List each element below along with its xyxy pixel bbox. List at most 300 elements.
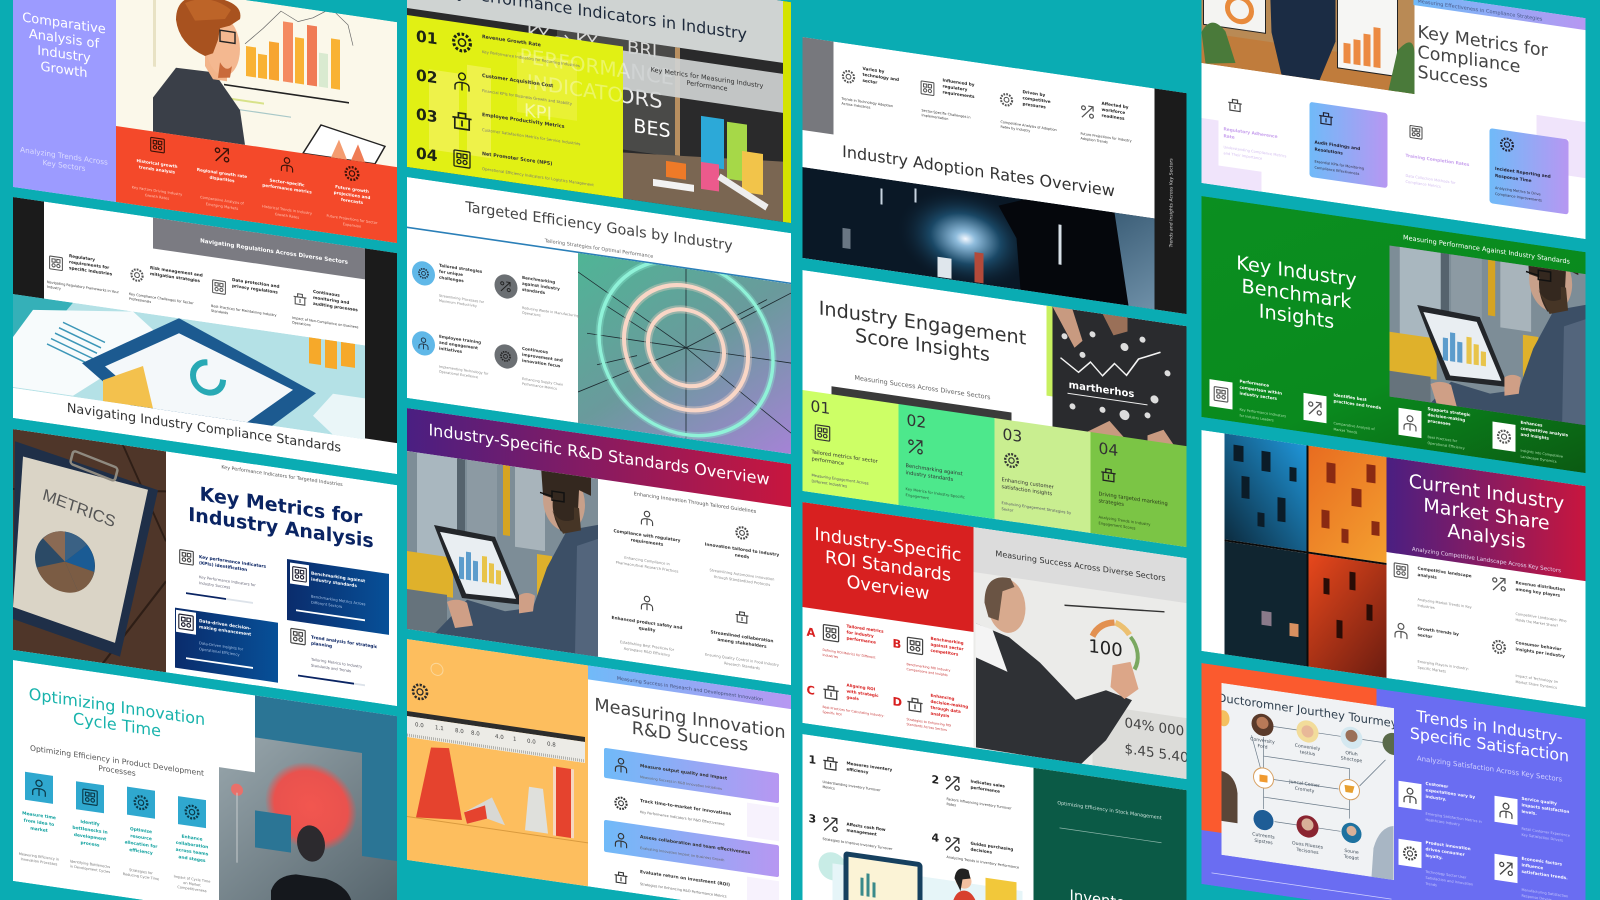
metric: Incident Reporting	[1490, 128, 1568, 215]
market share items: Emerging Players in Industry-	[1418, 660, 1470, 671]
panel: Key Metrics for Industry Analysis	[13, 429, 397, 706]
side label: Key Metrics for Measuring Industry	[651, 66, 764, 90]
photo: person facing red brain	[219, 690, 397, 900]
image: customer journey diagram: Cutreents	[1252, 831, 1275, 841]
adoption items row: requirements	[942, 89, 975, 99]
market share items: Impact of Technology on	[1516, 674, 1558, 684]
metric: Regulatory Adherence Rate: and Their Importance	[1224, 151, 1263, 161]
metric: Incident Reporting: Analyzing Metrics to Drive	[1495, 186, 1541, 197]
R&D standards items: Enhanced product safety and	[612, 615, 682, 631]
inventory items: 4	[931, 831, 939, 845]
compliance items row: Industry	[47, 285, 61, 291]
compliance items row: Impact of Non-Compliance on Business	[292, 316, 359, 329]
ROI items: competitors	[930, 648, 959, 657]
KPI list on lime panel	[407, 15, 631, 200]
subtitle: Analyzing Satisfaction Across Key Sectors	[1417, 753, 1562, 784]
R&D standards items: Aerospace R&D Efficiency	[624, 647, 671, 658]
KPI list on lime panel: INDICATO	[527, 70, 623, 108]
photo: metrics clipboard: METRICS	[41, 485, 117, 531]
ROI items: Benchmarking	[930, 636, 964, 646]
metric card: KPIs: Key Performance Indicators for	[199, 575, 256, 588]
photo: man marking gauge on whiteboard: 100	[1088, 636, 1123, 662]
ROI items: Industries	[822, 653, 839, 659]
metric card: data-driven: Data-driven decision-	[199, 618, 251, 632]
title: Key Industry	[1236, 251, 1357, 292]
engagement step 02: 02	[906, 411, 926, 432]
panel: Key Performance Indicators in Industry	[407, 0, 791, 223]
KPI list on lime panel: Customer Acquisition Cost	[482, 73, 554, 89]
market share items: Analyzing Market Trends in Key	[1418, 598, 1472, 609]
metric: Audit Findings: Audit Findings and	[1314, 140, 1360, 152]
image: customer journey diagram	[1222, 683, 1394, 880]
benchmark items	[1210, 374, 1569, 466]
KPI list on lime panel: Financial KPIs for Business Growth and Stability	[482, 88, 573, 106]
benchmark items: Best Practices for	[1428, 435, 1458, 443]
image: customer journey diagram: Ouos Rlueses	[1292, 840, 1324, 851]
goals list: Enhancing Supply Chain	[522, 377, 563, 387]
red band with four growth items: Expansion	[343, 222, 361, 229]
satisfaction items: satisfaction trends.	[1522, 869, 1568, 881]
KPI list on lime panel: 02	[416, 66, 438, 87]
ROI items: decision-making	[930, 699, 968, 709]
metric: Training Completion Rates: Training Completion Rates	[1406, 153, 1470, 168]
KPI list on lime panel: Operational Efficiency Indicators for Logistics Management	[482, 166, 594, 187]
inventory items: Metrics	[822, 785, 835, 791]
R&D standards items: Research Standards	[724, 661, 760, 671]
satisfaction items: levels.	[1522, 809, 1537, 816]
metric: Regulatory Adherence Rate: Regulatory Adherence	[1224, 126, 1278, 140]
ROI items: Specific ROI	[822, 710, 842, 717]
decorative pale blocks	[1202, 66, 1586, 239]
compliance items row: Best Practices for Maintaining Industry	[211, 304, 277, 317]
KPI list on lime panel: 01	[416, 27, 438, 48]
title: Key Metrics for	[1418, 23, 1549, 62]
panel: Measuring Innovation R&D Success	[407, 639, 791, 900]
engagement step 03	[994, 418, 1090, 533]
image: customer journey diagram: Juncal Comer	[1288, 779, 1320, 789]
innovation steps: process	[80, 840, 100, 849]
compliance items row: monitoring and	[313, 295, 349, 305]
inventory items: efficiency	[846, 766, 869, 775]
KPI list on lime panel: Customer Satisfaction Metrics for Service Industries	[482, 127, 580, 146]
metric card: trend analysis: planning	[311, 641, 332, 650]
top band	[1414, 0, 1586, 30]
adoption items row: Adoption Trends	[1080, 136, 1108, 144]
red band with four growth items: Comparative Analysis of	[200, 195, 245, 206]
innovation steps: across teams	[176, 847, 209, 858]
subtitle: Measuring Performance Against Industry Standards	[1403, 233, 1571, 266]
satisfaction items: impacts satisfaction	[1522, 802, 1569, 814]
title: Navigating Industry Compliance Standards	[67, 401, 341, 456]
innovation steps: and stages	[178, 854, 206, 864]
title: Insights	[1259, 299, 1334, 333]
title: Optimizing Innovation	[29, 684, 205, 729]
engagement step 03: 03	[1002, 425, 1022, 446]
inventory items: Rates	[946, 802, 956, 807]
engagement step 03: Enhancing customer	[1001, 477, 1055, 491]
illustration: ruler and measuring shapes: 0.0	[527, 739, 536, 746]
image: customer journey diagram: Ford	[1258, 743, 1268, 751]
subtitle: Measuring Success Across Diverse Sectors	[854, 374, 991, 402]
goals list	[412, 259, 579, 394]
photo: chalkboard with hands	[1052, 306, 1186, 446]
red title block: Overview	[847, 573, 929, 605]
red band with four growth items: projections and	[334, 190, 370, 200]
red band with four growth items: trends analysis	[139, 164, 176, 175]
engagement step 01: performance	[811, 456, 844, 467]
side bar with vertical label	[1154, 88, 1186, 314]
subtitle: Enhancing Innovation Through Tailored Guidelines	[634, 491, 757, 515]
goals list: Streamlining Processes for	[439, 294, 485, 304]
compliance items row: mitigation strategies	[150, 271, 200, 283]
engagement step 01: 01	[810, 397, 830, 418]
market share items: Industries	[1418, 604, 1435, 610]
innovation steps: bottlenecks in	[72, 825, 108, 836]
innovation steps: Enhance	[182, 834, 202, 843]
benchmark items: Supports strategic	[1428, 406, 1471, 417]
goals list: Tailored strategies	[439, 263, 483, 274]
metric: Regulatory Adherence Rate: Understanding Compliance Metrics	[1224, 145, 1287, 158]
adoption items row: Across Industries	[842, 102, 871, 110]
title: Score Insights	[855, 324, 990, 366]
compliance items row: Operations	[292, 321, 311, 327]
satisfaction items: expectations vary by	[1426, 787, 1475, 799]
compliance items row: Data protection and	[232, 277, 280, 289]
ROI items: Defining ROI Metrics for Different	[822, 648, 876, 660]
market share items	[1394, 562, 1567, 691]
subtitle: Measuring Success Across Diverse Sectors	[995, 549, 1166, 583]
title: Trends in Industry-	[1415, 706, 1563, 747]
inventory items: 1	[808, 753, 816, 767]
photo: chalkboard and colored blocks	[514, 21, 791, 223]
metric: Audit Findings	[1310, 102, 1388, 188]
metric: Training Completion Rates: Data Collection Methods for	[1406, 174, 1456, 185]
engagement step 03: satisfaction insights	[1001, 484, 1052, 497]
metric card: benchmarking: Benchmarking against	[311, 571, 365, 584]
metric card: KPIs: Key performance indicators	[199, 554, 266, 570]
inventory items: Affects cash flow	[847, 821, 886, 832]
metric card: KPIs: (KPIs) identification	[199, 560, 247, 573]
ROI items: goals	[847, 694, 859, 701]
title: Cycle Time	[73, 709, 161, 741]
metric: Regulatory Adherence Rate: Rate	[1224, 133, 1235, 141]
ROI items: A	[806, 625, 815, 640]
metric card: benchmarking: Benchmarking Metrics Across	[311, 595, 365, 606]
satisfaction items: Retail Customer Experience	[1522, 827, 1570, 838]
red band with four growth items: forecasts	[341, 197, 363, 205]
photo: chalkboard and colored blocks: PERFORMANCE	[514, 42, 674, 90]
image: customer journey diagram: Conversity	[1250, 736, 1275, 746]
engagement step 01: Measuring Engagement Across	[812, 473, 869, 486]
engagement step 02	[898, 404, 994, 519]
metric card: data-driven	[175, 608, 278, 683]
engagement step 03: Enhancing Engagement Strategies by	[1001, 501, 1072, 515]
panel: Key Metrics for Compliance Success	[1202, 0, 1586, 239]
benchmark items: Key Performance Indicators	[1240, 408, 1286, 418]
illustration: ruler and measuring shapes: 1.1	[435, 725, 444, 732]
metric: Audit Findings: Resolutions	[1314, 147, 1343, 157]
metric: Training Completion Rates	[1406, 125, 1470, 193]
photo: man marking gauge on whiteboard	[974, 527, 1186, 779]
R&D standards items: Streamlining Automotive Innovation	[710, 568, 774, 582]
adoption items row: Future Projections for Industry	[1080, 132, 1132, 143]
top band: Measuring Success in Research and Development Innovation	[617, 676, 763, 703]
image: customer journey diagram: Conveniely	[1295, 743, 1320, 752]
metric: Incident Reporting: Response Time	[1495, 173, 1532, 184]
benchmark items: and insights	[1520, 432, 1549, 441]
R&D standards items: quality	[639, 625, 656, 634]
innovation steps	[19, 771, 210, 894]
KPI list on lime panel: 04	[416, 144, 438, 165]
R&D standards items: among stakeholders	[717, 637, 767, 650]
header band: Navigating Regulations Across Diverse Sectors	[200, 238, 349, 266]
photo: chalkboard and colored blocks: KY → KY — BRI	[527, 23, 657, 62]
market share items: insights per industry	[1516, 646, 1565, 659]
market share items: Growth trends by	[1418, 626, 1459, 637]
metric card: benchmarking	[287, 559, 389, 635]
inventory items: Measures inventory	[846, 760, 893, 772]
compliance items row: Key Compliance Challenges for Sector	[129, 292, 194, 305]
adoption items row: Sector-Specific Challenges in	[921, 108, 971, 120]
innovation steps: resource	[130, 833, 152, 842]
panel: Current Industry Market Share Analysis	[1202, 430, 1586, 707]
measures list: Strategies for Enhancing R&D Performance Metrics	[640, 882, 727, 899]
goals list: for unique	[439, 269, 463, 277]
photo: presenter with dashboards	[1202, 0, 1414, 94]
inventory items: management	[847, 827, 877, 837]
compliance items row: privacy regulations	[232, 283, 278, 295]
green side panel	[1034, 768, 1186, 900]
red band with four growth items: Sector-specific	[270, 177, 305, 188]
photo: engineer with tablet	[407, 451, 598, 657]
benchmark items: industry sectors	[1240, 391, 1278, 401]
innovation steps: on Market	[183, 881, 201, 887]
panel: Optimizing Innovation Cycle Time	[13, 660, 397, 900]
metric card: data-driven: making enhancement	[199, 624, 251, 638]
engagement step 02: Benchmarking against	[905, 463, 963, 477]
adoption items row	[841, 63, 1132, 148]
market share items: sector	[1418, 632, 1433, 639]
gradient title block: Market Share	[1423, 493, 1550, 535]
metric card: benchmarking: industry standards	[311, 577, 357, 589]
metric card: data-driven: Operational Efficiency	[199, 647, 240, 657]
measures list: Assess collaboration and team effectiveness	[640, 834, 750, 856]
R&D standards items: Ensuring Quality Control in Food Industry	[705, 653, 780, 667]
image: customer journey diagram: testius	[1300, 749, 1316, 758]
image: customer journey diagram: Tecisones	[1296, 847, 1319, 856]
benchmark items: Comparative Analysis of	[1334, 421, 1375, 431]
satisfaction items: Trends	[1425, 882, 1437, 887]
KPI list on lime panel: 03	[416, 105, 438, 126]
adoption items row: pressures	[1022, 101, 1046, 110]
satisfaction items: loyalty.	[1426, 853, 1443, 860]
metric: Regulatory Adherence Rate	[1224, 98, 1287, 164]
goals list: Maximum Productivity	[439, 299, 477, 308]
ROI items: C	[806, 683, 815, 698]
title: Success	[1418, 63, 1488, 93]
gradient title block: Analyzing Competitive Landscape Across Key Sectors	[1412, 547, 1561, 574]
engagement step 04	[1090, 432, 1186, 547]
side label: Performance	[686, 79, 728, 93]
top band	[588, 665, 791, 709]
innovation steps: Competitiveness	[177, 885, 207, 893]
market share items: Consumer behavior	[1516, 640, 1562, 652]
engagement step 03: Sector	[1001, 507, 1014, 513]
ROI items: for industry	[846, 629, 874, 638]
image: customer journey diagram: Toogot	[1343, 854, 1359, 862]
adoption items row: Implementation	[921, 113, 948, 121]
photo: neon target rings	[578, 253, 791, 454]
ROI items: Standards Across Sectors	[906, 722, 947, 732]
ROI items: Benchmarking ROI Industry	[906, 662, 950, 673]
ROI items: Comparisons and Insights	[906, 667, 948, 677]
panel: Targeted Efficiency Goals by Industry	[407, 177, 791, 454]
satisfaction items: Manufacturing Satisfaction	[1522, 888, 1568, 899]
image: customer journey diagram: Cromety	[1295, 786, 1315, 794]
adoption items row: Rates by Industry	[1000, 125, 1030, 133]
illustration: ruler and measuring shapes: 0.8	[547, 741, 556, 749]
benchmark items: Insights into Competitive	[1520, 449, 1563, 459]
image: customer journey diagram: Ofiuh	[1345, 750, 1358, 758]
goals list: challenges	[439, 275, 464, 283]
innovation steps: efficiency	[129, 847, 153, 856]
ROI items	[806, 618, 968, 735]
ROI items: Strategies to Enhancing ROI	[906, 717, 951, 728]
engagement step 01: Different Industries	[811, 479, 847, 489]
innovation steps: from idea to	[24, 818, 54, 828]
red band with four growth items: Future growth	[335, 184, 369, 194]
red band with four growth items	[116, 126, 397, 243]
KPI list on lime panel: Employee Productivity Metrics	[482, 112, 565, 130]
benchmark items: Enhances	[1520, 420, 1543, 428]
title: Specific Satisfaction	[1410, 724, 1569, 766]
green side panel: Optimizing Efficiency in Stock Management	[1057, 800, 1162, 821]
panel: Navigating Industry Compliance Standards	[13, 197, 397, 474]
goals list: improvement and	[522, 352, 563, 363]
panel: Inventory Turnover Insights	[802, 734, 1186, 900]
satisfaction items: influence	[1522, 862, 1543, 870]
photo: four-colored spiked quadrants	[1224, 433, 1386, 678]
measures list: Evaluate return on investment (ROI)	[640, 869, 730, 888]
goals list: Operational Excellence	[439, 370, 478, 379]
goals list: initiatives	[439, 346, 463, 354]
compliance items row: Professionals	[129, 297, 151, 304]
satisfaction items: Service quality	[1522, 796, 1557, 806]
subtitle: Key Sectors	[43, 158, 86, 173]
ROI items: Best Practices for Calculating Industry-	[822, 705, 884, 718]
engagement step 02: Engagement	[905, 493, 930, 501]
inventory items	[808, 753, 1019, 870]
innovation steps: in Development Cycles	[70, 864, 110, 874]
ROI items: D	[892, 694, 902, 710]
engagement step 01: Tailored metrics for sector	[811, 449, 879, 465]
ROI items: analysis	[930, 711, 950, 719]
compliance items row: requirements for	[69, 259, 110, 270]
compliance items row: Standards	[211, 309, 228, 315]
market share items: analysis	[1418, 572, 1437, 580]
title: R&D Success	[632, 718, 748, 756]
metric card: KPIs: Industry Success	[199, 581, 230, 590]
R&D standards items: Compliance with regulatory	[614, 528, 681, 544]
red band with four growth items: Future Projections for Sector	[327, 214, 378, 225]
inventory items: decisions	[970, 847, 993, 855]
photo: man marking gauge on whiteboard: 04%	[1124, 715, 1155, 735]
compliance items row: Continuous	[313, 289, 340, 298]
satisfaction items: Customer	[1426, 781, 1449, 789]
illustration: inventory monitor and worker	[818, 847, 1022, 900]
image: customer journey diagram: Sipstres	[1254, 838, 1273, 846]
benchmark items: for Industry Leaders	[1240, 414, 1274, 423]
image: customer journey diagram: Shoctope	[1341, 755, 1362, 764]
adoption items row: technology and	[862, 72, 899, 82]
innovation steps: Measuring Efficiency in	[19, 852, 59, 862]
ROI items: through data	[930, 705, 961, 714]
red title block: ROI Standards	[825, 548, 951, 586]
illustration: ruler and measuring shapes: 8.0	[471, 730, 480, 738]
market share items: among key players	[1516, 586, 1561, 598]
compliance items row: Regulatory	[69, 253, 95, 262]
adoption items row: regulatory	[942, 83, 968, 92]
engagement step 04: 04	[1098, 439, 1118, 460]
title: Measuring Innovation	[594, 694, 786, 743]
adoption items row: Varies by	[862, 66, 885, 74]
metric card: benchmarking: Different Sectors	[311, 601, 342, 609]
R&D standards items	[612, 506, 780, 673]
measures list: Measuring Success in R&D Innovation Initiatives	[640, 775, 722, 791]
satisfaction items: Economic factors	[1522, 856, 1562, 867]
R&D standards items: Enhancing Compliance in	[624, 556, 670, 566]
red band with four growth items: Regional growth rate	[197, 167, 247, 179]
R&D standards items: Establishing Best Practices for	[620, 640, 675, 652]
market share items: Competitive landscape	[1418, 566, 1472, 578]
compliance items row: Navigating Regulatory Frameworks in Your	[47, 280, 120, 295]
illustration: ruler and measuring shapes: 8.0	[455, 728, 464, 735]
photo: businessman and glowing data	[802, 167, 1154, 310]
photo: chalkboard with hands: martherhos	[1069, 380, 1134, 400]
title: Benchmark	[1242, 274, 1352, 313]
benchmark items: practices and trends	[1334, 398, 1382, 410]
compliance items row: Risk management and	[150, 265, 203, 278]
R&D standards items: Streamlined collaboration	[711, 629, 773, 644]
satisfaction items: Healthcare Industry	[1426, 818, 1460, 827]
ROI items: against sector	[930, 642, 964, 652]
inventory items: Indicates sales	[970, 779, 1005, 789]
KPI list on lime panel: KPI	[524, 100, 552, 125]
benchmark items: Identifies best	[1334, 392, 1367, 402]
illustration: ruler and measuring shapes: 0.0	[415, 722, 424, 730]
adoption items row: Trends in Technology Adoption	[841, 97, 893, 108]
title: Industry	[37, 44, 91, 66]
side bar with vertical label: Trends and Insights Across Key Sectors	[1169, 157, 1174, 249]
R&D standards items: requirements	[631, 537, 664, 548]
goals list: Operations	[522, 311, 541, 318]
panel: Comparative Analysis of Industry Growth	[13, 0, 397, 243]
ROI items: Tailored metrics	[846, 623, 884, 634]
red title block	[802, 502, 974, 632]
ROI items: B	[892, 636, 901, 651]
innovation steps: collaboration	[176, 840, 208, 851]
metric card: data-driven: Data-Driven Insights for	[199, 641, 244, 652]
satisfaction items: Emerging Satisfaction Metrics in	[1426, 812, 1482, 824]
panel: Key Industry Benchmark Insights	[1202, 196, 1586, 473]
engagement step 04: strategies	[1098, 498, 1124, 508]
measures list: Track time-to-market for innovations	[640, 798, 732, 817]
goals list: Employee training	[439, 334, 481, 345]
measures list: Key Performance Indicators for R&D Effectiveness	[640, 810, 725, 826]
KPI list on lime panel: PERFORMA	[520, 44, 631, 84]
benchmark items: Market Trends	[1334, 427, 1357, 435]
ROI items: Enhancing	[930, 693, 954, 701]
